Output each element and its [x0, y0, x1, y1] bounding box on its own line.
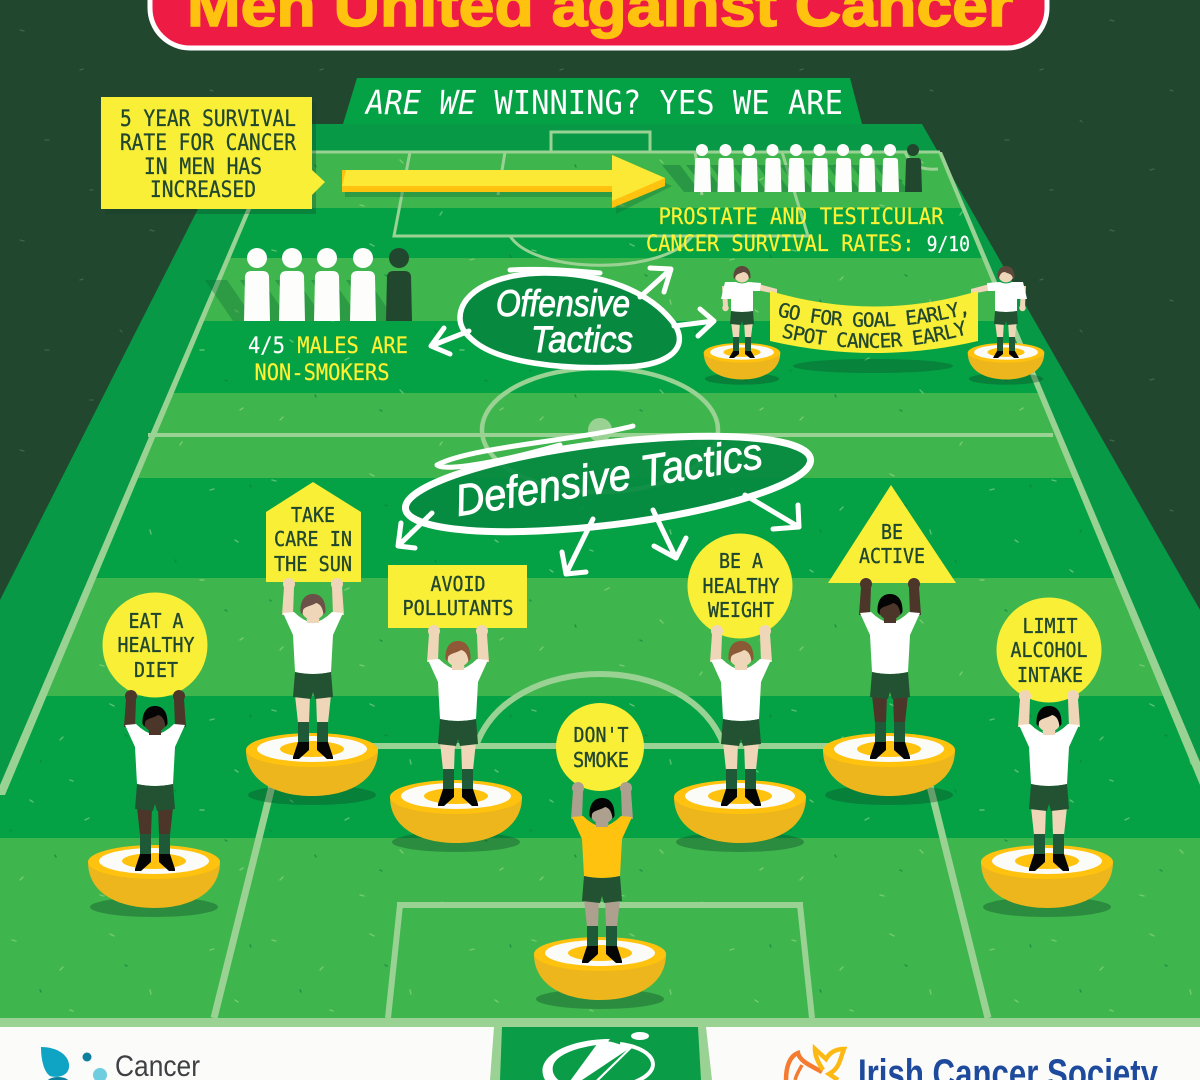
- survival callout: 5 YEAR SURVIVAL: [120, 107, 296, 132]
- defensive tactics callout: Defensive Tactics: [452, 429, 766, 526]
- sign: take care in the sun: TAKE: [291, 503, 335, 527]
- sign: avoid pollutants: POLLUTANTS: [402, 596, 514, 620]
- survival callout: INCREASED: [150, 178, 256, 203]
- prostate and testicular stat: CANCER SURVIVAL RATES: 9/10: [646, 231, 970, 257]
- sign: limit alcohol intake: LIMIT: [1022, 614, 1078, 638]
- logo: centre emblem: [542, 1032, 653, 1080]
- sign: avoid pollutants: [388, 565, 527, 628]
- banner: go for goal early: SPOT CANCER EARLY: [782, 320, 964, 348]
- arrow: to be active: [745, 495, 799, 529]
- arrow: to go for goal: [674, 309, 714, 336]
- offensive tactics callout: Offensive: [496, 283, 630, 324]
- heading tab: ARE WE WINNING? YES WE ARE: [364, 83, 843, 122]
- title banner: [150, 0, 1047, 48]
- sign: avoid pollutants: AVOID: [430, 572, 486, 596]
- sign: be active: [828, 485, 956, 583]
- arrow: survival increasing: [342, 155, 672, 214]
- offensive tactics callout: Tactics: [531, 319, 633, 360]
- non-smokers stat: NON-SMOKERS: [254, 360, 390, 386]
- survival callout: RATE FOR CANCER: [120, 131, 297, 156]
- banner: go for goal early: GO FOR GOAL EARLY,: [779, 302, 966, 328]
- prostate and testicular stat: PROSTATE AND TESTICULAR: [658, 204, 944, 230]
- player: avoid pollutants: [388, 565, 527, 852]
- sign: eat a healthy diet: DIET: [134, 658, 178, 682]
- logo: irish cancer society: [786, 1049, 1159, 1080]
- player: don't smoke: [534, 703, 666, 1009]
- arrow: to don't smoke: [562, 519, 593, 574]
- sign: don't smoke: [556, 703, 644, 791]
- defensive tactics callout: [398, 418, 815, 574]
- player: limit alcohol intake: [981, 598, 1113, 917]
- sign: take care in the sun: THE SUN: [274, 552, 352, 576]
- icon row: four of five non-smokers: [205, 248, 412, 321]
- sign: be a healthy weight: WEIGHT: [708, 598, 774, 622]
- logo: cancer trials: [41, 1047, 200, 1080]
- sign: don't smoke: SMOKE: [573, 748, 629, 772]
- sign: limit alcohol intake: [996, 598, 1102, 702]
- sign: limit alcohol intake: INTAKE: [1017, 663, 1083, 687]
- banner player left: [704, 266, 780, 385]
- prostate and testicular stat: [646, 204, 970, 257]
- sign: take care in the sun: CARE IN: [274, 527, 352, 551]
- arrow: to non-smokers: [431, 328, 469, 354]
- non-smokers stat: 4/5 MALES ARE: [248, 333, 408, 359]
- sign: be a healthy weight: HEALTHY: [702, 574, 780, 598]
- offensive tactics callout: [431, 268, 714, 368]
- sign: be a healthy weight: BE A: [719, 549, 763, 573]
- sign: eat a healthy diet: HEALTHY: [118, 633, 194, 657]
- sign: be a healthy weight: [688, 534, 792, 638]
- player: be a healthy weight: [674, 534, 806, 852]
- icon row: nine of ten survivors: [662, 144, 922, 192]
- arrow: to avoid pollutants: [398, 513, 432, 548]
- sign: eat a healthy diet: EAT A: [128, 609, 184, 633]
- arrow: to healthy weight: [653, 510, 686, 558]
- sign: don't smoke: DON'T: [574, 723, 628, 747]
- banner: go for goal early: [770, 291, 978, 373]
- survival callout: IN MEN HAS: [144, 155, 262, 180]
- sign: take care in the sun: [266, 482, 361, 582]
- player: be active: [823, 485, 956, 805]
- player: eat a healthy diet: [88, 592, 220, 917]
- banner player right: [968, 266, 1044, 385]
- footer: [0, 1018, 1200, 1080]
- sign: be active: ACTIVE: [859, 544, 925, 568]
- sign: be active: BE: [881, 520, 903, 544]
- non-smokers stat: [248, 333, 408, 386]
- player: take care in the sun: [246, 482, 378, 805]
- arrow: to banner players: [640, 268, 671, 297]
- sign: limit alcohol intake: ALCOHOL: [1010, 638, 1088, 662]
- survival callout: [101, 97, 325, 214]
- sign: eat a healthy diet: [102, 592, 208, 698]
